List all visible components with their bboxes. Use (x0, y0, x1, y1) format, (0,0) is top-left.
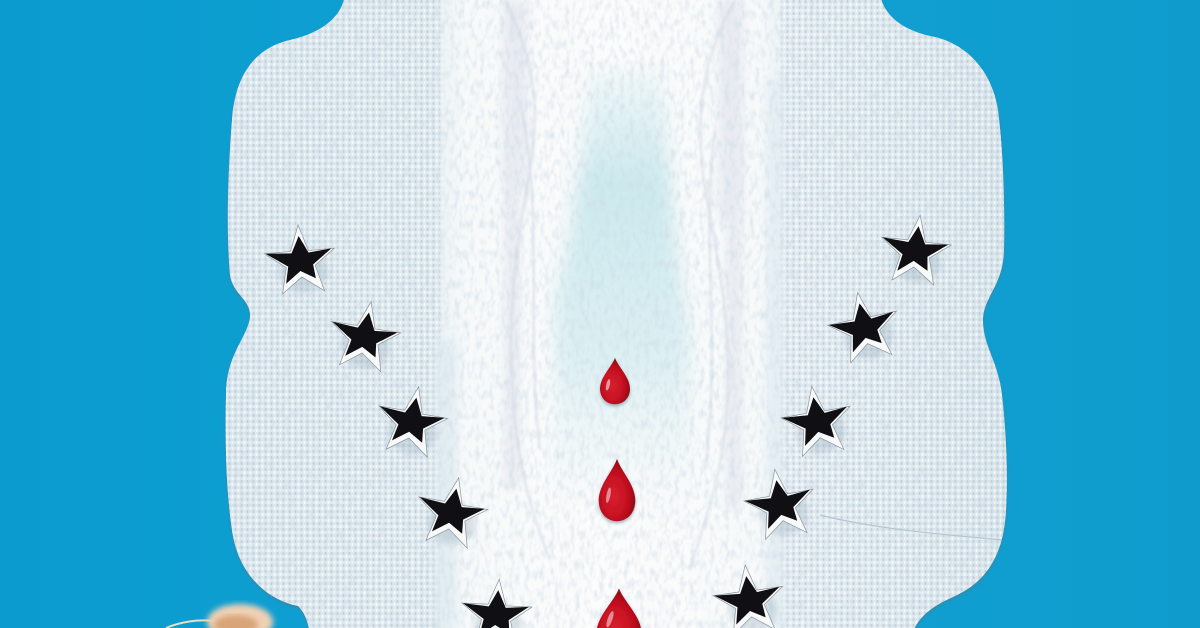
drop: small top (600, 358, 630, 404)
stars: right arc (710, 210, 955, 628)
pad: channel shading (436, 0, 782, 628)
pad: embossed channels (505, 0, 735, 570)
dried flower: bottom left (166, 604, 273, 628)
stars: left arc (263, 223, 534, 628)
red drops (596, 358, 642, 628)
pad: outer shape with wings (220, 0, 1010, 628)
drop: bottom (596, 588, 642, 628)
pad: core grain (220, 0, 1010, 628)
pad: quilted texture (220, 0, 1010, 628)
pad: white central core (441, 0, 781, 628)
pad: blue-tinted absorbent strip (555, 70, 690, 520)
photo scene: sanitary pad on blue background (166, 0, 1008, 628)
pad: edge fold line (820, 515, 1003, 540)
drop: middle (599, 459, 635, 521)
